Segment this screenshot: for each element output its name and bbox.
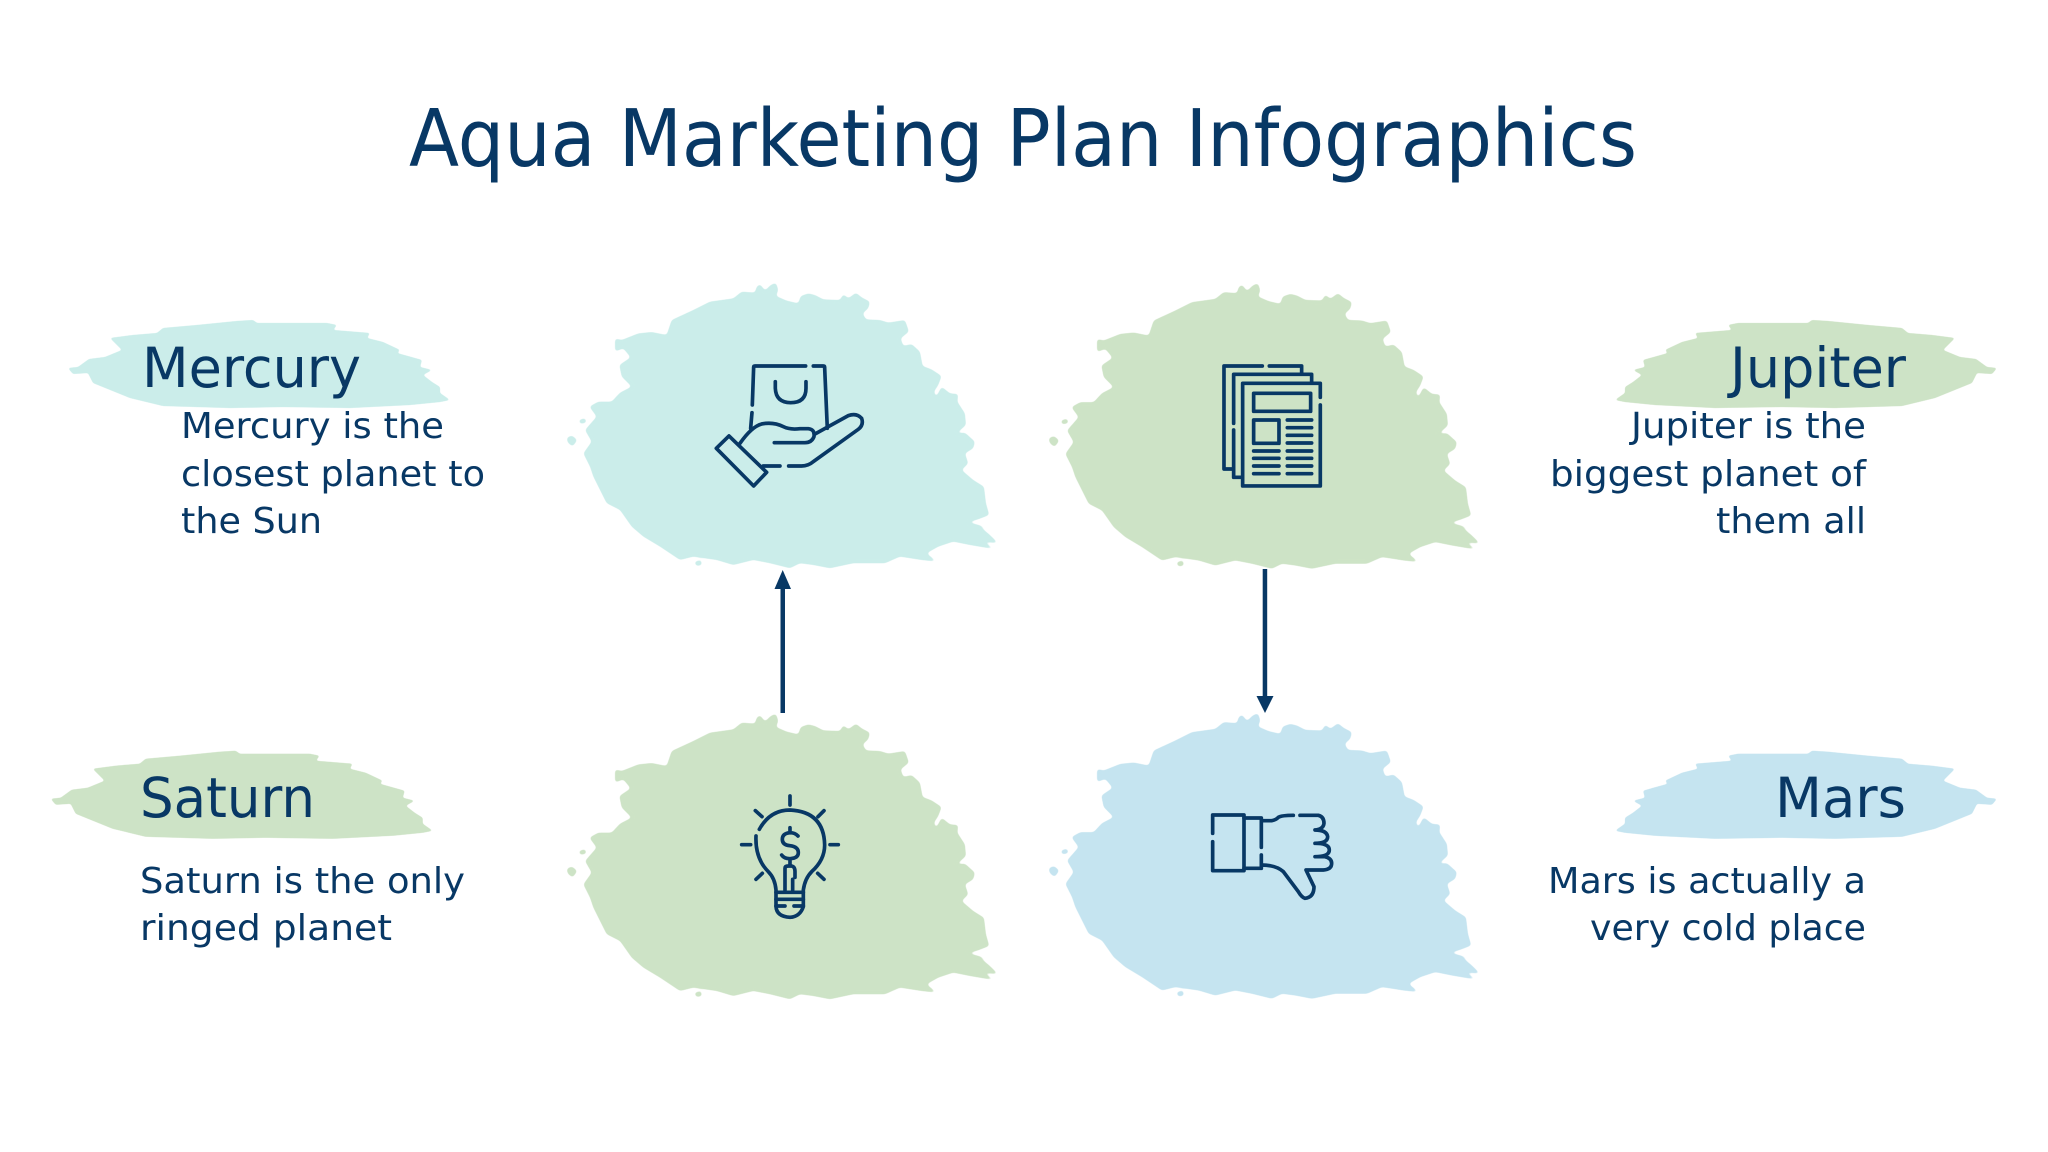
panel: top-left icon blob: [567, 283, 998, 568]
blob: green: [1049, 283, 1480, 569]
text: Jupiter description: them all: [1716, 501, 1866, 542]
icon: hand holding shopping bag: [716, 366, 862, 486]
heading: Mercury: Mercury: [142, 336, 361, 400]
text: Saturn description: [140, 861, 465, 949]
arrow: down from top-right to bottom-right: [1256, 569, 1274, 713]
text: Mercury description: [181, 406, 485, 542]
brush: green: [51, 751, 433, 839]
title: Aqua Marketing Plan Infographics: [409, 93, 1637, 185]
text: Jupiter description: Jupiter is the: [1629, 406, 1866, 447]
text: Mars description: very cold place: [1590, 908, 1866, 949]
panel: bottom-left icon blob: [567, 714, 998, 999]
panel: bottom-right icon blob: [1049, 713, 1480, 999]
brush: mint: [68, 320, 450, 408]
text: Mars description: Mars is actually a: [1548, 861, 1866, 902]
blob: light blue: [1049, 713, 1480, 999]
arrow: up from bottom-left to top-left: [774, 570, 791, 713]
panel: Mars: [1548, 751, 1997, 949]
brush: green: [1615, 320, 1997, 408]
heading: Saturn: Saturn: [140, 766, 315, 830]
icon: newspapers: [1224, 366, 1320, 486]
blob: mint: [567, 283, 998, 568]
text: Jupiter description: biggest planet of: [1550, 454, 1867, 495]
icon: light bulb with dollar sign: [742, 796, 838, 917]
blob: green: [567, 714, 998, 999]
text: Mars description: [1548, 861, 1866, 949]
text: Mercury description: closest planet to: [181, 454, 485, 495]
panel: Jupiter: [1550, 320, 1997, 542]
text: Saturn description: ringed planet: [140, 908, 392, 949]
heading: Mars: Mars: [1775, 766, 1906, 830]
panel: top-right icon blob: [1049, 283, 1480, 569]
text: Saturn description: Saturn is the only: [140, 861, 465, 902]
heading: Jupiter: Jupiter: [1727, 336, 1906, 400]
brush: light blue: [1615, 751, 1997, 839]
text: Mercury description: the Sun: [181, 501, 322, 542]
text: Jupiter description: [1550, 406, 1867, 542]
icon: thumbs down: [1213, 815, 1332, 898]
text: Mercury description: Mercury is the: [181, 406, 444, 447]
panel: Saturn: [51, 751, 465, 949]
panel: Mercury: [68, 320, 485, 542]
